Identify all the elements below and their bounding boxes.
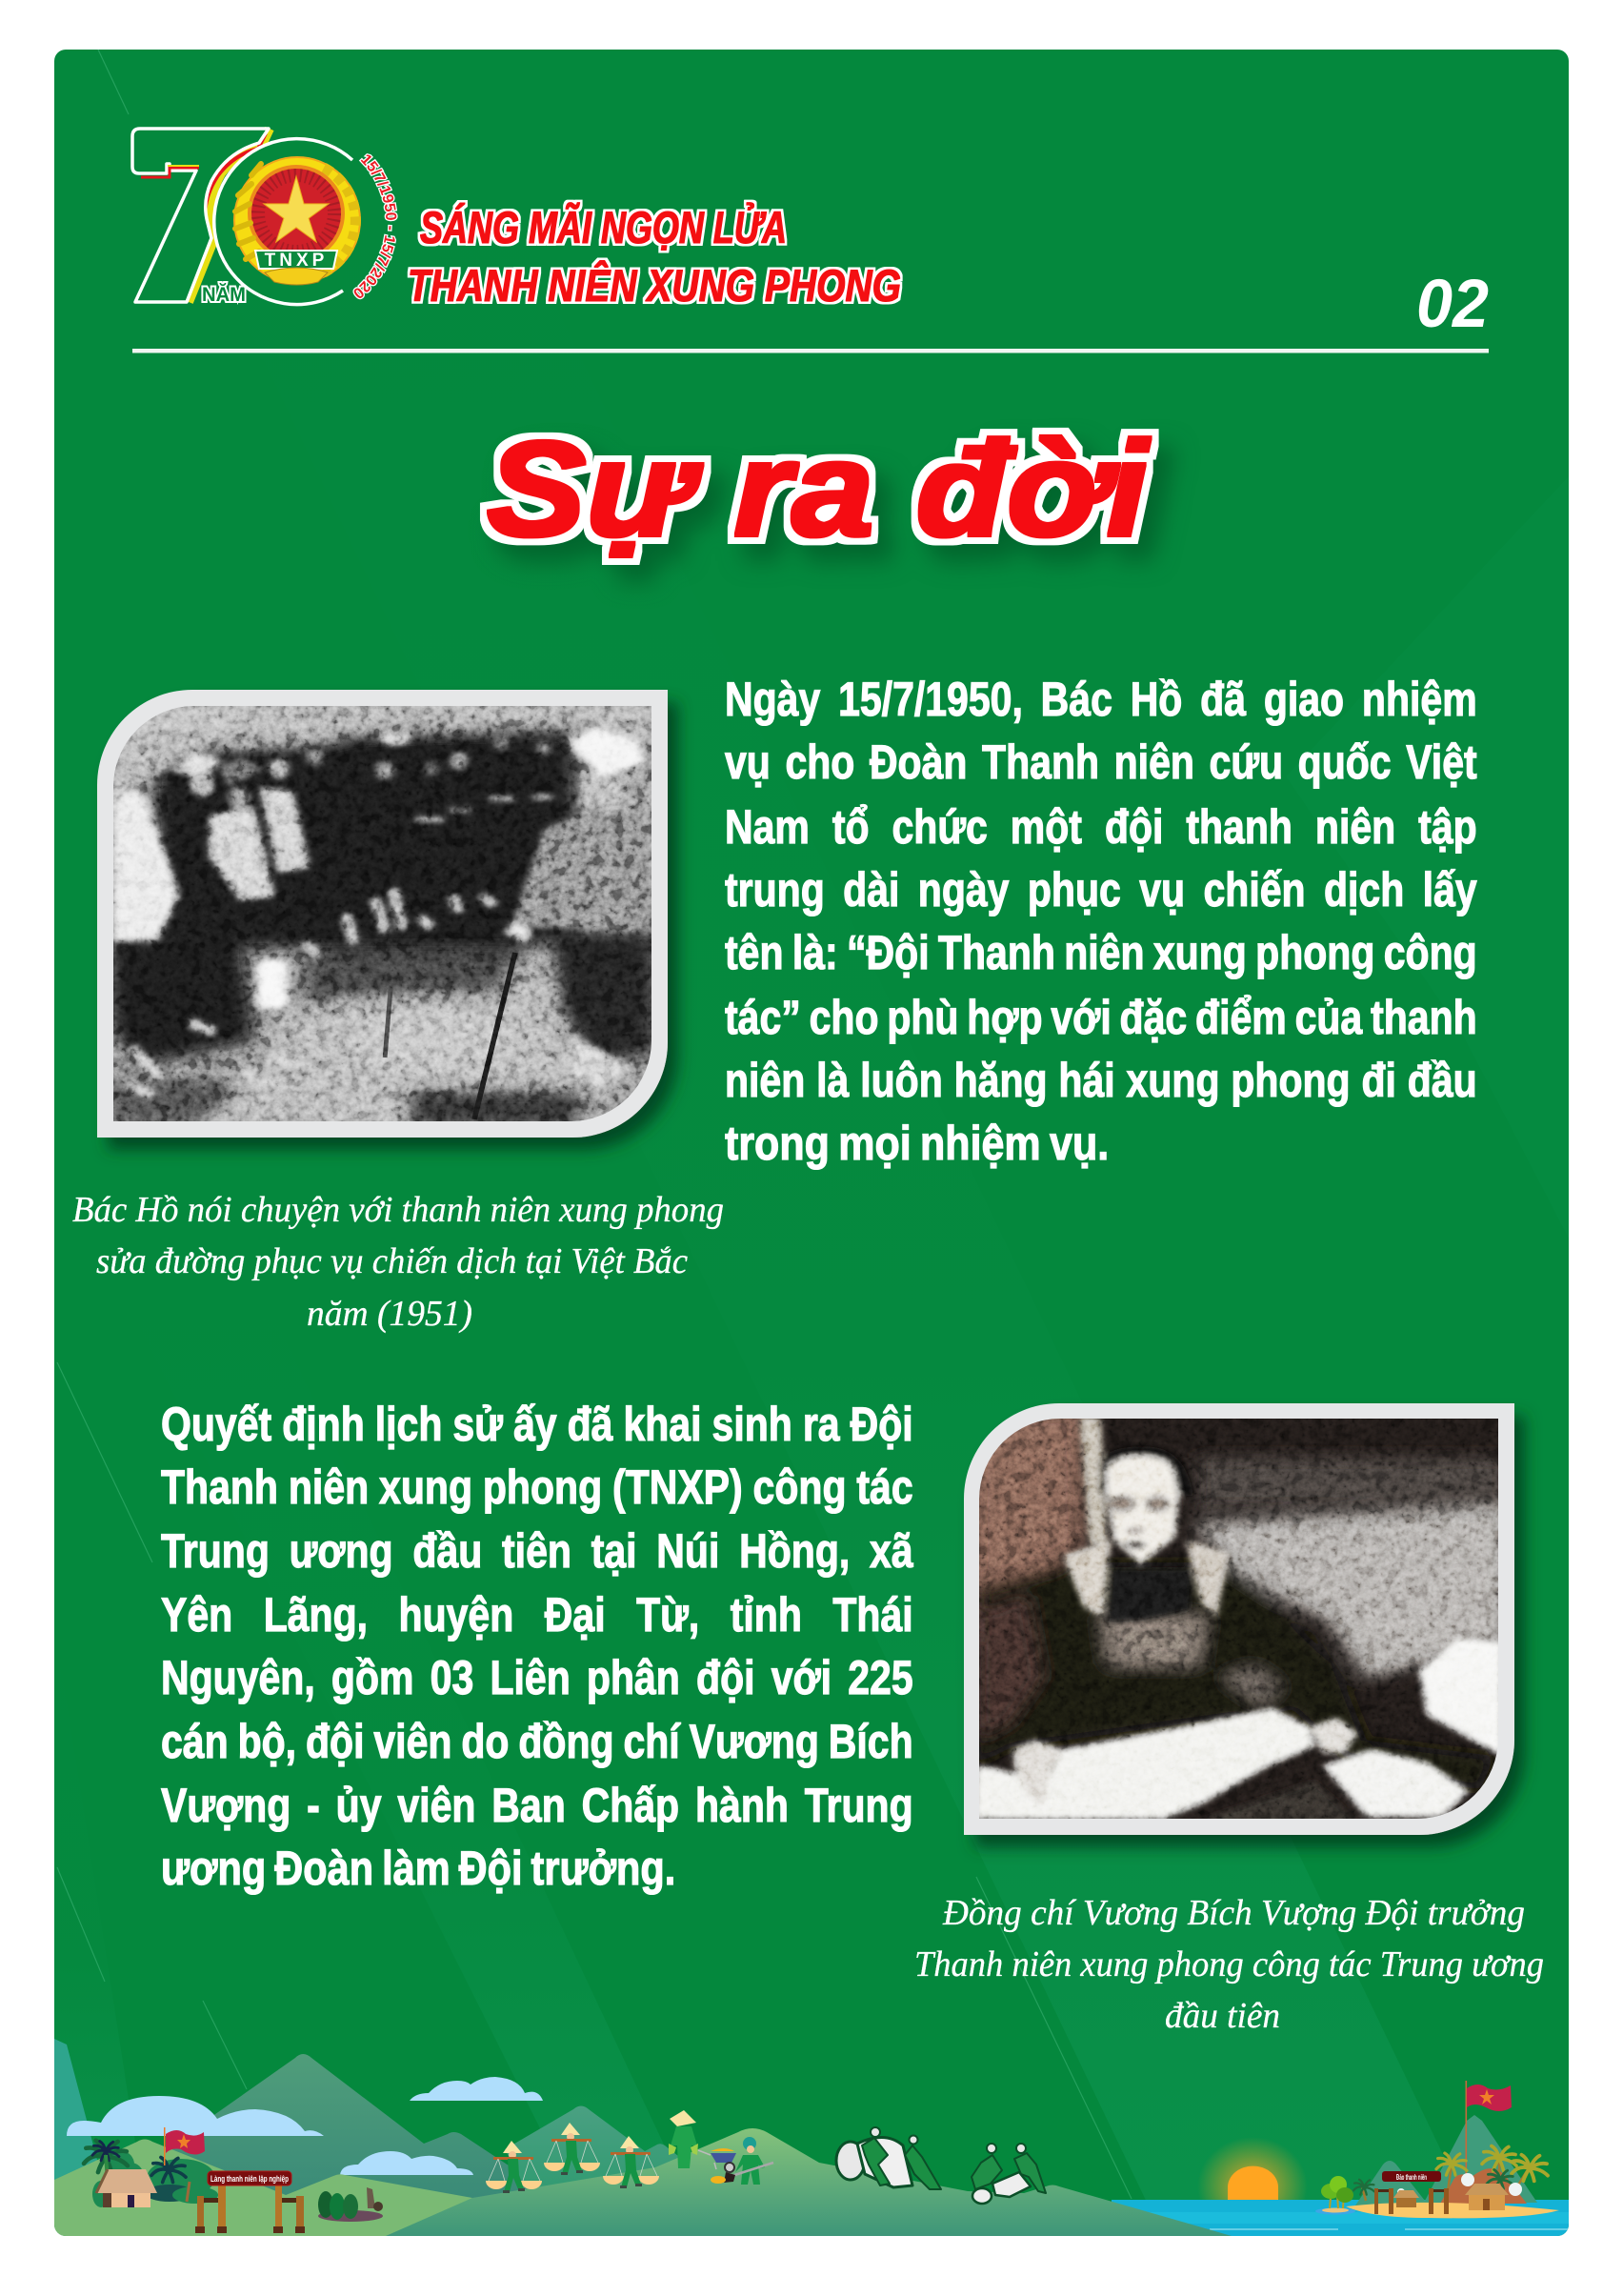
motorbike group 2 [972, 2144, 1046, 2204]
paragraph 2: Nguyên, gồm 03 Liên phân đội với 225 [161, 1651, 913, 1704]
palms [1353, 2145, 1548, 2201]
left teal slope [54, 2039, 97, 2180]
workers carrying baskets [486, 2110, 773, 2193]
paragraph 1: Ngày 15/7/1950, Bác Hồ đã giao nhiệm [725, 673, 1477, 726]
curved date text [335, 160, 386, 302]
paragraph 2: Quyết định lịch sử ấy đã khai sinh ra Đội [161, 1398, 913, 1451]
slogan [408, 202, 901, 311]
trees [92, 2151, 218, 2207]
numeral 7 [132, 129, 270, 306]
worker with shovel [711, 2137, 773, 2185]
wheelbarrow [698, 2148, 736, 2172]
island gate: Đảo thanh niên [1396, 2173, 1427, 2182]
paragraph 2: Trung ương đầu tiên tại Núi Hồng, xã [161, 1524, 913, 1578]
caption 2: đầu tiên [1165, 1996, 1280, 2036]
caption 1: năm (1951) [307, 1294, 472, 1334]
flag left [164, 2127, 205, 2165]
paragraph 2: Yên Lãng, huyện Đại Từ, tỉnh Thái [161, 1588, 913, 1641]
logo: 70 years TNXP emblem [130, 126, 398, 307]
woman with bundle [669, 2110, 698, 2168]
numeral 7: NĂM [202, 284, 246, 306]
bottom landscape [54, 2039, 1569, 2236]
main title: Sự ra đời [487, 413, 1151, 565]
emblem [234, 157, 360, 285]
paragraph 2: Vượng - ủy viên Ban Chấp hành Trung [161, 1779, 913, 1832]
caption 2: Thanh niên xung phong công tác Trung ương [914, 1944, 1544, 1984]
paragraph 1: tác” cho phù hợp với đặc điểm của thanh [725, 991, 1477, 1044]
caption 2 [914, 1893, 1544, 2036]
motorbike group 1 [836, 2127, 941, 2189]
page number: 02 [1416, 267, 1489, 342]
ring [214, 139, 352, 305]
house [96, 2169, 157, 2207]
paragraph 1: vụ cho Đoàn Thanh niên cứu quốc Việt [725, 735, 1477, 789]
island with flag [1346, 2081, 1559, 2218]
photo frame [964, 1403, 1514, 1835]
photo 2: Vương Bích Vượng [964, 1403, 1514, 1835]
emblem: TNXP [265, 251, 328, 271]
paragraph 2: ương Đoàn làm Đội trưởng. [161, 1842, 675, 1895]
caption 2: Đồng chí Vương Bích Vượng Đội trưởng [942, 1893, 1525, 1933]
gate: youth village: Làng thanh niên lập nghiệp [210, 2174, 289, 2184]
left village: palm, house, trees [84, 2141, 218, 2207]
slogan: THANH NIÊN XUNG PHONG [408, 260, 901, 311]
paragraph 1: tên là: “Đội Thanh niên xung phong công [725, 926, 1477, 979]
gate: youth village [195, 2171, 305, 2233]
caption 1: sửa đường phục vụ chiến dịch tại Việt Bắc [96, 1241, 688, 1281]
flag right [1465, 2081, 1512, 2185]
small palm islet [1315, 2176, 1355, 2214]
palm [84, 2141, 190, 2202]
green hills [54, 2140, 472, 2236]
paragraph 1: trong mọi nhiệm vụ. [725, 1117, 1109, 1170]
paragraph 1: trung dài ngày phục vụ chiến dịch lấy [725, 863, 1477, 916]
caption 1: Bác Hồ nói chuyện với thanh niên xung phong [72, 1190, 724, 1230]
houses [1393, 2184, 1509, 2210]
photo frame [97, 690, 668, 1138]
paragraph 1: niên là luôn hăng hái xung phong đi đầu [725, 1054, 1477, 1107]
paragraph 2 [160, 1398, 914, 1895]
paragraph 1 [724, 673, 1478, 1170]
island gate [1374, 2171, 1449, 2214]
logo: 70 years TNXP emblem: 15/7/1950 - 15/7/2020 [352, 153, 398, 299]
sea [1112, 2200, 1569, 2236]
paragraph 1: Nam tổ chức một đội thanh niên tập [725, 800, 1477, 854]
mountains [171, 2054, 527, 2199]
paragraph 2: Thanh niên xung phong (TNXP) công tác [161, 1460, 913, 1514]
header rule [132, 349, 1489, 352]
sun [1200, 2139, 1306, 2200]
paragraph 2: cán bộ, đội viên do đồng chí Vương Bích [161, 1715, 913, 1768]
caption 1 [72, 1190, 724, 1334]
slogan: SÁNG MÃI NGỌN LỬA [420, 202, 787, 252]
clouds [67, 2077, 543, 2175]
seated group [318, 2187, 383, 2222]
photo 1: Bác Hồ with youth volunteers [97, 690, 668, 1138]
